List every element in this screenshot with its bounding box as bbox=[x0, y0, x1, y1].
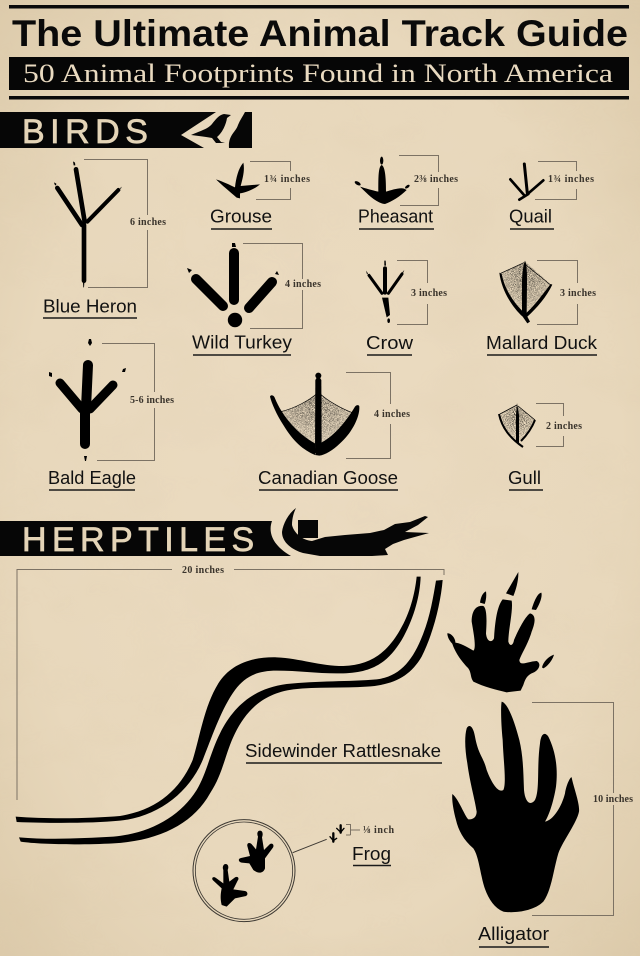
magnifier circle bbox=[193, 820, 344, 922]
track: quail bbox=[509, 162, 594, 229]
section header: herptiles bbox=[0, 508, 429, 559]
title: The Ultimate Animal Track Guide bbox=[12, 13, 628, 54]
track: frog bbox=[193, 820, 394, 922]
enlarged footprints bbox=[212, 831, 273, 907]
track: blue heron: 6 inches bbox=[130, 217, 166, 228]
name: Blue Heron bbox=[43, 296, 137, 316]
track: sidewinder rattlesnake bbox=[16, 565, 444, 844]
footprint bbox=[452, 702, 579, 912]
track: alligator: 10 inches bbox=[593, 794, 633, 805]
size bracket bbox=[17, 570, 444, 800]
track: pheasant: 2⅜ inches bbox=[414, 174, 458, 185]
track: grouse bbox=[210, 162, 310, 229]
track: pheasant bbox=[354, 156, 458, 229]
track: grouse: 1¾ inches bbox=[264, 174, 310, 185]
track: crow bbox=[366, 260, 447, 355]
tiny footprints bbox=[330, 825, 344, 842]
section header: herptiles: HERPTILES bbox=[22, 521, 260, 559]
track: lizard front foot bbox=[447, 572, 554, 692]
track: mallard duck: Mallard Duck bbox=[486, 333, 598, 353]
track: bald eagle bbox=[48, 339, 174, 490]
track: blue heron bbox=[43, 160, 166, 318]
track: alligator bbox=[452, 702, 633, 947]
section header: birds: BIRDS bbox=[22, 113, 153, 151]
track: canadian goose bbox=[258, 372, 410, 490]
section header: birds bbox=[0, 112, 252, 151]
track: gull: Gull bbox=[508, 468, 541, 488]
track: mallard duck: 3 inches bbox=[560, 288, 596, 299]
trail bbox=[16, 577, 443, 844]
track: pheasant: Pheasant bbox=[358, 206, 433, 226]
size bracket bbox=[84, 160, 148, 288]
track: wild turkey bbox=[187, 243, 321, 355]
icon: alligator bbox=[282, 508, 429, 556]
track: crow: 3 inches bbox=[411, 288, 447, 299]
name: Alligator bbox=[478, 924, 549, 944]
subtitle band: 50 Animal Footprints Found in North America bbox=[23, 59, 614, 88]
size bracket bbox=[532, 702, 614, 916]
track: canadian goose: Canadian Goose bbox=[258, 468, 398, 488]
icon: bird bbox=[191, 114, 231, 143]
track: frog: ⅛ inch bbox=[363, 825, 394, 836]
footprint bbox=[54, 161, 122, 287]
track: wild turkey: 4 inches bbox=[285, 279, 321, 290]
subtitle band bbox=[9, 57, 629, 90]
name: Sidewinder Rattlesnake bbox=[245, 741, 441, 761]
track: quail: 1¾ inches bbox=[548, 174, 594, 185]
track: crow: Crow bbox=[366, 333, 414, 353]
header bbox=[9, 5, 629, 100]
track: grouse: Grouse bbox=[210, 206, 272, 226]
name: Frog bbox=[352, 844, 391, 864]
size bracket bbox=[346, 824, 360, 835]
track: wild turkey: Wild Turkey bbox=[192, 332, 292, 352]
track: canadian goose: 4 inches bbox=[374, 409, 410, 420]
track: quail: Quail bbox=[509, 206, 552, 226]
track: bald eagle: Bald Eagle bbox=[48, 468, 136, 488]
track: sidewinder rattlesnake: 20 inches bbox=[182, 565, 224, 576]
track: mallard duck bbox=[486, 260, 598, 355]
track: bald eagle: 5-6 inches bbox=[130, 395, 174, 406]
track: gull bbox=[499, 403, 582, 490]
track: gull: 2 inches bbox=[546, 421, 582, 432]
